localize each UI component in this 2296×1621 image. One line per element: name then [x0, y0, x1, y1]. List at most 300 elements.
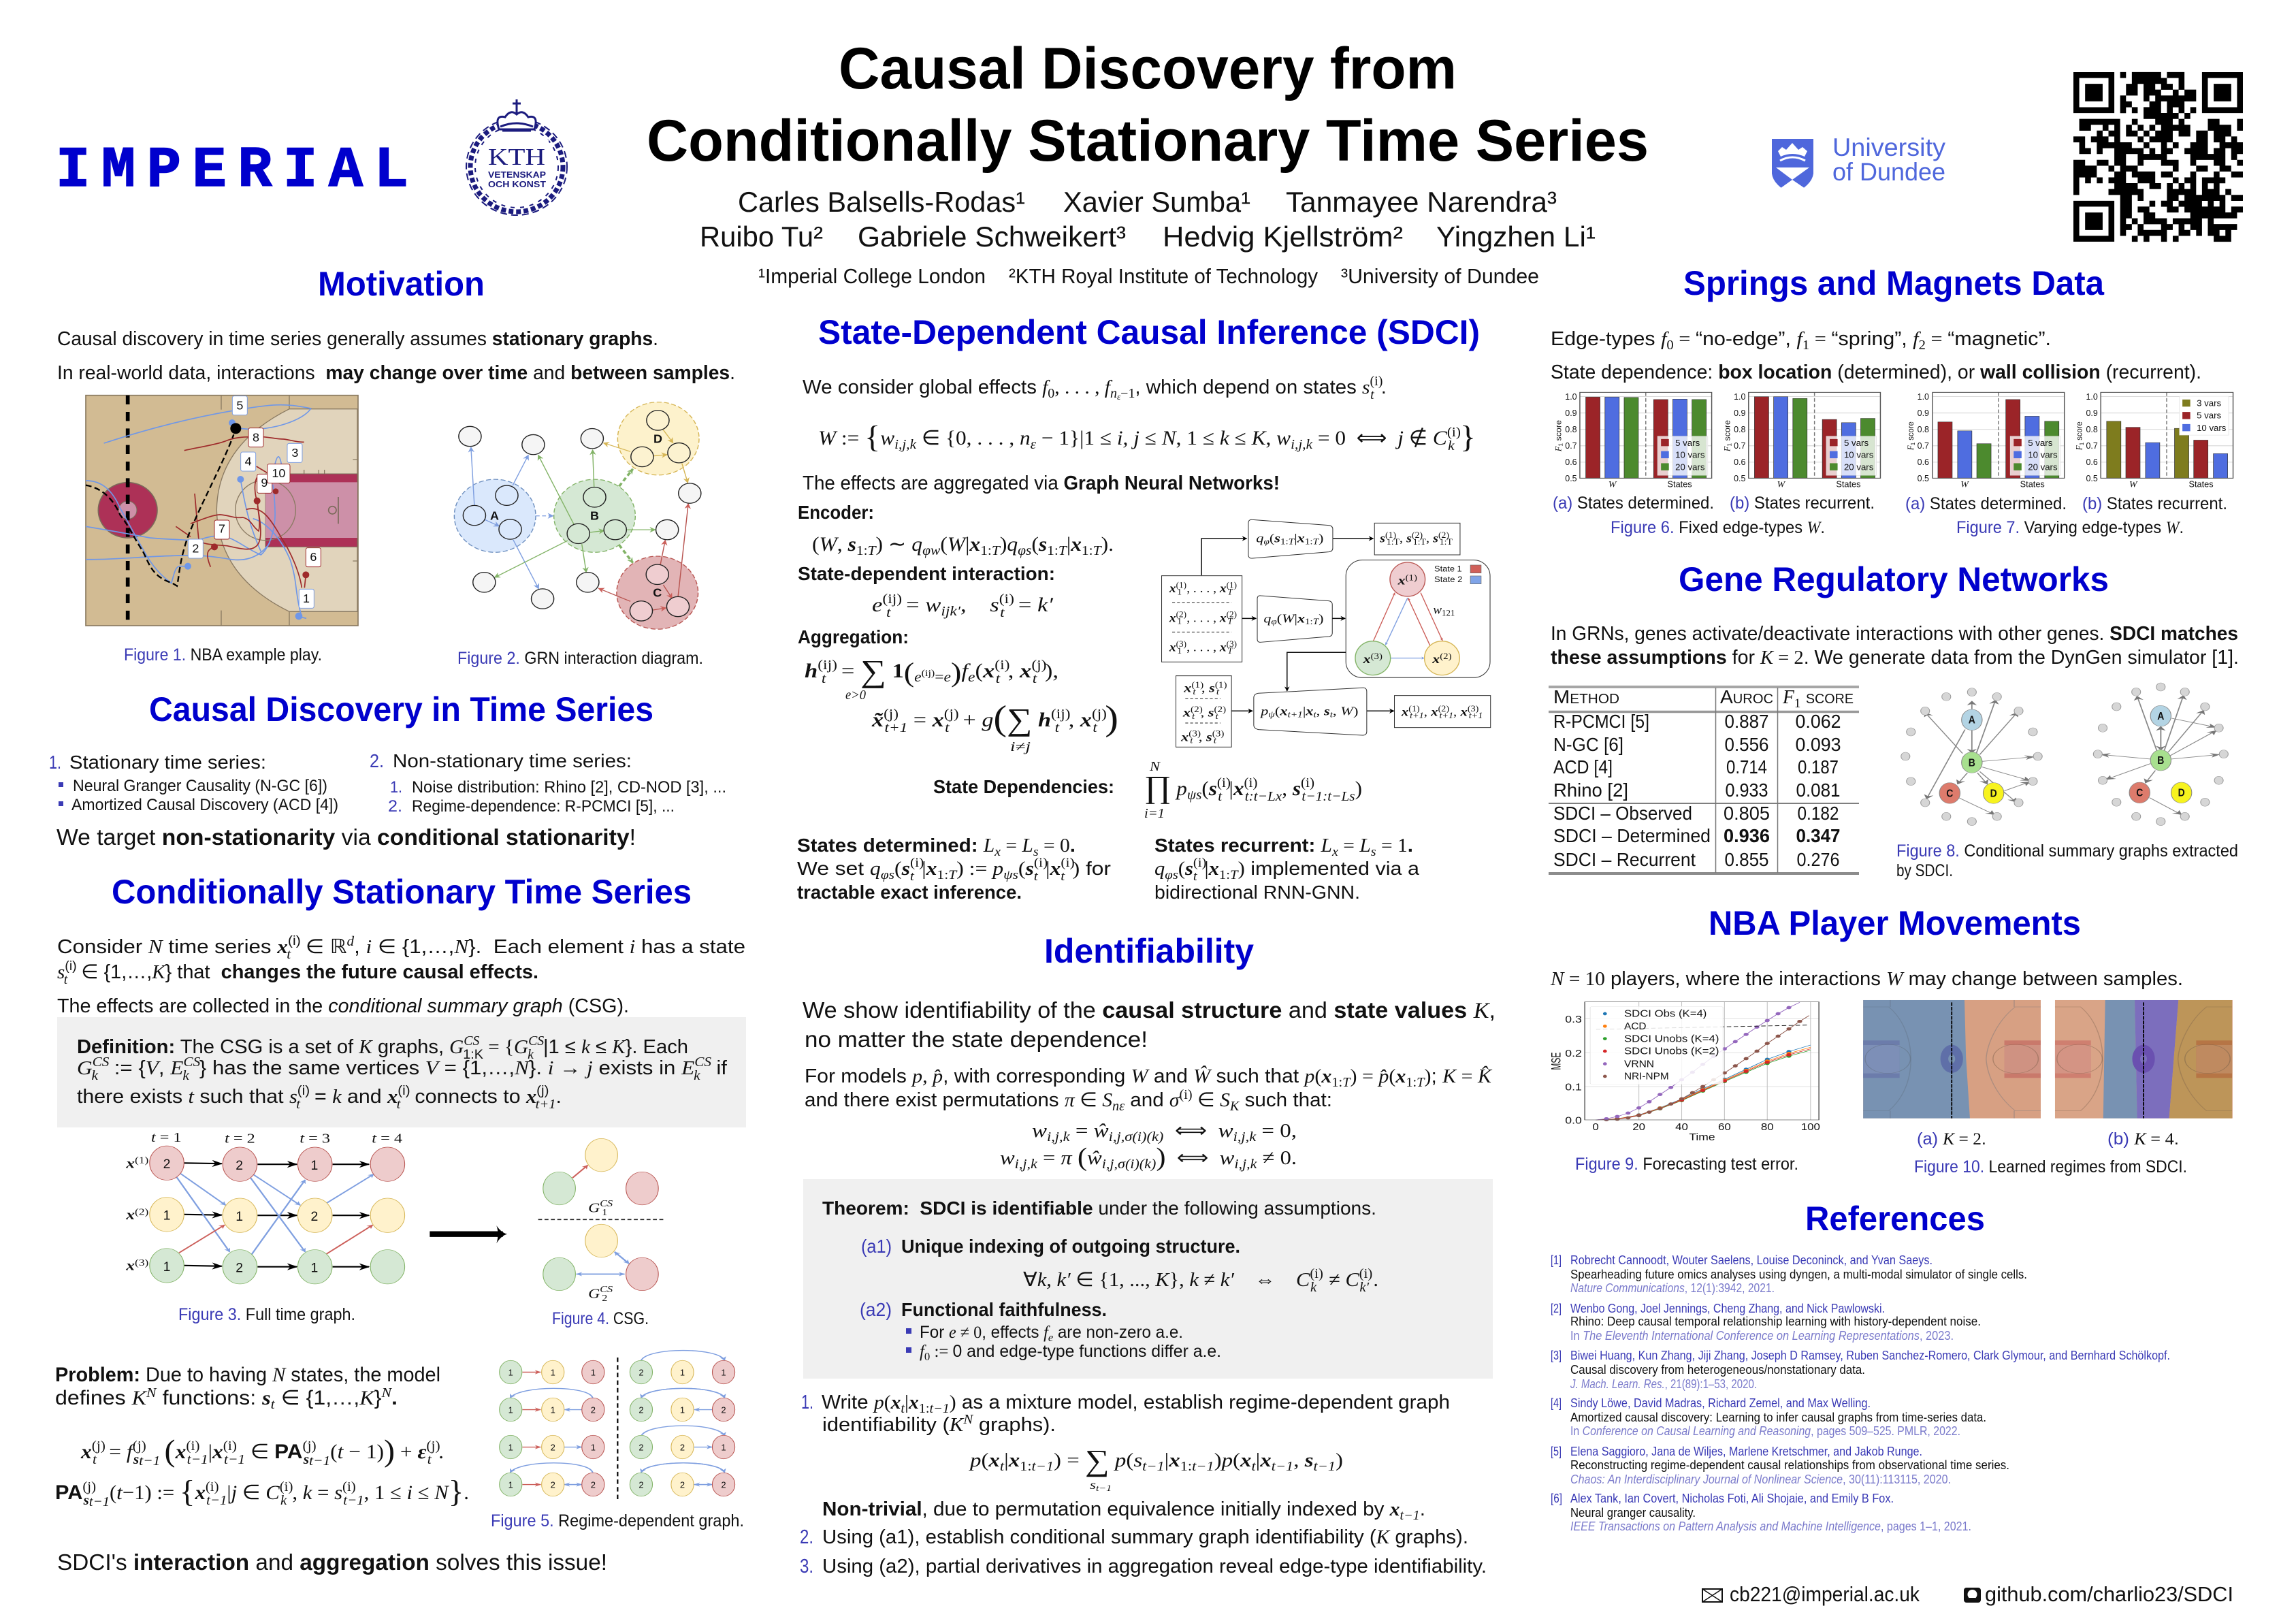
text: states recurrent: x — [1208, 858, 1219, 880]
diagram: SDCI architecture: , . . . , — [1186, 611, 1220, 624]
diagram: SDCI architecture: s — [1406, 532, 1412, 545]
figure 3: full time graph: 2 — [236, 1158, 243, 1173]
text: identifiability intro: ) — [1424, 1065, 1431, 1087]
diagram: SDCI architecture: , — [1199, 731, 1206, 743]
equation: parents: t−1 — [343, 1493, 364, 1508]
diagram: SDCI architecture: x — [1430, 705, 1438, 719]
equation: state-dependent model: = — [103, 1441, 127, 1463]
panel: definition: CS — [464, 1033, 480, 1048]
caption: figure 8: Figure 8. Conditional summary graphs extracted — [1896, 841, 2238, 861]
equation: state dependencies: ψs — [1187, 788, 1201, 803]
diagram: SDCI architecture: (2) — [1191, 705, 1203, 714]
equation: aggregation: ), — [1045, 660, 1058, 682]
diagram: SDCI architecture: x — [1169, 581, 1176, 595]
figure 8: summary graphs: B — [2157, 754, 2164, 767]
equation: state-dependent model: (i) — [223, 1439, 237, 1454]
equation: interaction: = — [900, 594, 925, 616]
equation: parents: , — [292, 1481, 303, 1504]
list: proof steps: | — [1165, 1449, 1169, 1471]
list: proof steps: x — [1008, 1449, 1020, 1471]
list: proof steps: 1: — [1020, 1459, 1032, 1474]
bar chart: fig 6a: score — [1554, 420, 1564, 443]
bar chart: fig 6a: 0.7 — [1565, 441, 1577, 451]
diagram: SDCI architecture: x — [1219, 611, 1227, 624]
text: consider: t — [287, 947, 291, 962]
diagram: SDCI architecture: ( — [1277, 612, 1282, 626]
bar chart: fig 6b: F — [1723, 446, 1732, 452]
figure 8: summary graphs: B — [1969, 756, 1975, 769]
diagram: SDCI architecture: 1 — [1177, 588, 1182, 596]
text: consider: i ∈ {1,…, N}. Each element i has a state — [366, 936, 737, 958]
bar chart: fig 7b: States — [2189, 480, 2214, 489]
figure 5: regime-dependent graph: 2 — [638, 1368, 644, 1378]
bar chart: fig 6b: 10 vars — [1844, 451, 1874, 460]
equation: permutations: = — [1070, 1120, 1094, 1142]
bar chart: fig 7b: 3 vars — [2197, 399, 2222, 408]
text: states recurrent: s — [1371, 845, 1376, 859]
text: problem — [55, 1364, 440, 1412]
equation: aggregation: (ij) — [818, 658, 837, 673]
text: identifiability intro: We show identifiability of the causal structure and state values K, — [803, 997, 1495, 1023]
diagram: SDCI architecture: (2) — [1176, 610, 1186, 620]
panel: theorem: := — [930, 1343, 953, 1361]
captions: figures 6 and 7: (b) States recurrent. — [2082, 494, 2227, 513]
table: results: 0.805 — [1724, 803, 1770, 824]
captions: figures 6 and 7: (b) States recurrent. — [1730, 494, 1875, 513]
equation: aggregation: e — [968, 670, 975, 685]
affiliations — [758, 264, 1539, 288]
text: consider: (i) — [65, 959, 77, 974]
bar chart: fig 7b: 0.5 — [2086, 474, 2098, 483]
references: Chaos: An Interdisciplinary Journal of Nonlinear Science, 30(11):113115, 2020. — [1570, 1472, 1951, 1486]
references: In The Eleventh International Conference on Learning Representations, 2023. — [1570, 1328, 1954, 1343]
equation: encoder: ) ∼ — [876, 533, 911, 556]
diagram: SDCI architecture: t — [1192, 711, 1195, 721]
panel: theorem: are non-zero a.e. — [1053, 1323, 1183, 1342]
diagram: SDCI architecture: x — [1180, 731, 1189, 743]
bar chart: fig 7b: 0.6 — [2086, 458, 2098, 467]
equation: aggregation: e) — [944, 657, 960, 688]
panel: definition: there exists t such that s — [77, 1086, 297, 1108]
captions: figures 6 and 7: Figure 7. Varying edge-types W. — [1956, 518, 2184, 537]
figure 5: regime-dependent graph: 1 — [508, 1405, 513, 1415]
references: [4] — [1551, 1396, 1562, 1410]
diagram: SDCI architecture: s — [1432, 532, 1438, 545]
equation: aggregation: ) — [1105, 699, 1118, 738]
references: Rhino: Deep causal temporal relationship learning with history-dependent noise. — [1570, 1314, 1981, 1328]
figure 3: full time graph — [125, 1129, 405, 1284]
equation: permutations: w — [1220, 1147, 1235, 1169]
line chart: forecasting test error: SDCI Unobs (K=4) — [1624, 1033, 1719, 1044]
diagram: SDCI architecture: T — [1227, 588, 1233, 596]
diagram: SDCI architecture: t — [1193, 687, 1196, 696]
text: identifiability intro: (i) — [1180, 1087, 1193, 1102]
text: global effects: f — [1105, 376, 1113, 398]
text: states recurrent: t — [1193, 869, 1197, 884]
equation: parents: j ∈ C — [231, 1481, 279, 1504]
equation: state-dependent model: | — [208, 1441, 212, 1463]
diagram: SDCI architecture: ) — [1319, 532, 1323, 546]
bar chart: fig 6b: 0.9 — [1734, 408, 1745, 418]
equation: permutations: = — [1037, 1147, 1061, 1169]
footer: github: github.com/charlio23/SDCI — [1985, 1582, 2233, 1606]
diagram: SDCI architecture: x — [1296, 532, 1305, 545]
diagram: SDCI architecture: x — [1397, 574, 1406, 587]
list: stationary and non-stationary: Noise distribution: Rhino [2], CD-NOD [3], ... — [412, 778, 726, 797]
list: proof steps: x — [908, 1392, 919, 1413]
text: states recurrent: q — [1154, 858, 1165, 880]
bar chart: fig 7b: 10 vars — [2197, 423, 2227, 433]
text: states recurrent: implemented via a — [1250, 858, 1405, 879]
equation: state-dependent model: t−1 — [309, 1454, 330, 1468]
equation: encoder: 1: — [980, 543, 992, 558]
figure 3: full time graph: (2) — [135, 1207, 149, 1217]
diagram: SDCI architecture: (1) — [1191, 680, 1203, 690]
equation: W set: W := — [818, 427, 858, 449]
equation: W set: ε — [1031, 437, 1037, 452]
equation: W set: w — [880, 427, 894, 449]
figure 1: NBA court play: 2 — [192, 541, 199, 555]
text: consider: ∈ {1,…, — [76, 961, 152, 983]
references: Robrecht Cannoodt, Wouter Saelens, Louise Deconinck, and Yvan Saeys. — [1570, 1253, 1933, 1267]
figure 3: full time graph: 1 — [163, 1259, 170, 1274]
list: stationary and non-stationary — [49, 750, 726, 816]
table: results: Rhino [2] — [1553, 780, 1628, 801]
list: proof steps: ) — [950, 1392, 956, 1413]
figure 4: CSG: CS — [600, 1284, 613, 1294]
list: proof steps — [800, 1392, 1487, 1577]
equation: state dependencies: t — [1218, 789, 1223, 804]
list: proof steps: ∑ — [1085, 1444, 1110, 1477]
bar chart: fig 6a: W — [1608, 481, 1617, 489]
references: Alex Tank, Ian Covert, Nicholas Foti, Ali Shojaie, and Emily B Fox. — [1570, 1491, 1894, 1505]
equation: parents: s — [83, 1493, 89, 1508]
equation: permutations: w — [1218, 1120, 1233, 1142]
equation: interaction: = — [1012, 594, 1037, 616]
captions: figures 6 and 7: (a) States determined. — [1905, 494, 2067, 513]
logo: KTH: VETENSKAP — [488, 170, 546, 180]
panel: definition: G — [77, 1057, 93, 1079]
table: results: 1 — [1794, 696, 1800, 711]
equation: aggregation: (j) — [1092, 707, 1107, 722]
references: Sindy Löwe, David Madras, Richard Zemel, and Max Welling. — [1570, 1396, 1871, 1410]
equation: state-dependent model: t−1 — [187, 1452, 208, 1467]
list: proof steps: ) — [1214, 1449, 1222, 1471]
equation: encoder: | — [1067, 533, 1071, 556]
text: states determined: ψs — [1003, 868, 1018, 882]
list: proof steps: graphs). — [973, 1414, 1056, 1436]
diagram: SDCI architecture: (2) — [1227, 610, 1237, 620]
captions: figure 10: (b) K = 4. — [2107, 1129, 2179, 1149]
line chart: forecasting test error: 0 — [1592, 1122, 1599, 1133]
text: problem: s — [261, 1387, 271, 1409]
panel: definition: t — [296, 1097, 301, 1112]
diagram: SDCI architecture: x — [1279, 705, 1288, 718]
references: [2] — [1551, 1301, 1562, 1315]
text: consider: The effects are collected in the conditional summary graph (CSG). — [57, 995, 629, 1017]
diagram: SDCI architecture: x — [1363, 652, 1371, 666]
figure 1: NBA court play: 6 — [310, 550, 317, 564]
panel: definition: Definition: The CSG is a set of K graphs, G — [77, 1036, 464, 1058]
logo: University of Dundee: University — [1832, 133, 1946, 161]
diagram: SDCI architecture: , . . . , — [1186, 581, 1220, 595]
text: problem: ∈ {1,…, — [275, 1387, 359, 1409]
equation: aggregation: (i) — [995, 658, 1009, 673]
list: proof steps: s — [1090, 1478, 1095, 1492]
table: results: SDCI – Determined — [1553, 825, 1711, 846]
authors: Tanmayee Narendra³ — [1286, 186, 1557, 218]
text: states determined: (i) — [1061, 856, 1075, 870]
equation: interaction: (ij) — [882, 592, 902, 607]
list: proof steps: (s — [1126, 1449, 1142, 1471]
equation: parents: PA — [55, 1481, 82, 1504]
affiliations: ³University of Dundee — [1341, 264, 1539, 288]
table: results: ACD [4] — [1553, 756, 1613, 777]
references: [3] — [1551, 1348, 1562, 1362]
list: proof steps: Using (a1), establish conditional summary graph identifiability ( K graphs). — [822, 1526, 1468, 1548]
captions: figure 10: (a) K = 2. — [1917, 1129, 1986, 1149]
panel: theorem: Unique indexing of outgoing structure. — [901, 1236, 1240, 1257]
text: states determined: s — [1024, 858, 1034, 880]
text: global effects: −1 — [1120, 386, 1135, 401]
equation: encoder: T — [1058, 543, 1068, 558]
diagram: SDCI architecture: T — [1289, 537, 1295, 546]
equation: W set: { — [864, 419, 880, 454]
list: proof steps: t — [901, 1401, 905, 1416]
list: proof steps: t−1 — [1096, 1483, 1112, 1493]
text: states determined: T — [948, 868, 958, 882]
text: states determined: p — [991, 858, 1003, 880]
text: states recurrent: = — [1338, 835, 1359, 856]
text: consider: (i) — [288, 933, 301, 948]
equation: state dependencies: i=1 — [1144, 806, 1165, 821]
diagram: SDCI architecture: t — [1215, 711, 1218, 721]
bar chart: fig 7b: 1 — [2078, 443, 2085, 445]
text: edge types: “magnetic”. — [1947, 328, 2046, 350]
equation: encoder: T — [992, 543, 1001, 558]
equation: state-dependent model: t−1 — [224, 1452, 245, 1467]
diagram: SDCI architecture: t+1 — [1288, 709, 1303, 719]
bar chart: fig 6a: 0.6 — [1565, 458, 1577, 467]
list: proof steps: Non-trivial, due to permutation equivalence initially indexed by x — [822, 1498, 1400, 1520]
figure 5: regime-dependent graph: 1 — [551, 1368, 555, 1378]
bar chart: fig 7a: 20 vars — [2028, 463, 2058, 472]
diagram: SDCI architecture: x — [1182, 706, 1191, 720]
bar chart: fig 6b — [1723, 392, 1880, 489]
equation: parents: { — [180, 1474, 195, 1509]
panel: theorem: (a2) — [860, 1299, 892, 1320]
figure 1: NBA court play: 1 — [303, 592, 310, 605]
text: global effects: ε — [1117, 391, 1121, 402]
bar chart: fig 7a: F — [1907, 445, 1915, 451]
panel: definition: k — [182, 1068, 190, 1083]
text: edge types: State dependence: box location (determined), or wall collision (recurrent). — [1551, 362, 2201, 383]
figure 3: full time graph: 2 — [236, 1261, 243, 1275]
equation: permutations: i,j,k — [1233, 1129, 1257, 1144]
panel: definition: CS — [528, 1033, 544, 1048]
diagram: SDCI architecture: x — [1401, 705, 1408, 719]
text: identifiability intro: and there exist permutations π ∈ S — [805, 1089, 1112, 1111]
panel: definition: t — [397, 1097, 401, 1112]
panel: theorem: ∀k, k′ ∈ {1, ..., K}, k ≠ k′ ⇔ C — [1023, 1269, 1309, 1291]
diagram: SDCI architecture: (3) — [1227, 639, 1237, 649]
panel: theorem: (i) — [1359, 1266, 1372, 1281]
bar chart: fig 6a: 20 vars — [1675, 463, 1705, 472]
line chart: forecasting test error: 0.2 — [1565, 1048, 1582, 1059]
equation: aggregation: t — [1093, 720, 1098, 735]
panel: definition: k ≤ K}. Each — [581, 1036, 688, 1058]
figure 1: NBA court play: 7 — [219, 521, 225, 535]
panel: definition: 1:K — [463, 1047, 483, 1062]
text: states determined: for — [1085, 858, 1107, 879]
bar chart: fig 6b: States — [1836, 480, 1861, 489]
authors: Carles Balsells-Rodas¹ — [738, 186, 1025, 218]
line chart: forecasting test error: SDCI Unobs (K=2) — [1624, 1046, 1719, 1057]
panel: definition: (j) — [536, 1083, 549, 1098]
figure 5: regime-dependent graph: 1 — [680, 1368, 685, 1378]
diagram: SDCI architecture: x — [1183, 681, 1191, 695]
figure 5: regime-dependent graph: 1 — [591, 1443, 596, 1453]
bar chart: fig 6b: W — [1777, 481, 1786, 489]
line chart: forecasting test error: 40 — [1675, 1122, 1688, 1133]
references: Elena Saggioro, Jana de Wiljes, Marlene Kretschmer, and Jakob Runge. — [1570, 1444, 1922, 1458]
logo: University of Dundee: of Dundee — [1832, 158, 1945, 186]
panel: definition: connects to — [409, 1086, 526, 1108]
equation: encoder: ( — [940, 533, 948, 556]
equation: aggregation: ( — [975, 660, 983, 682]
caption: figure 2: Figure 2. GRN interaction diagram. — [457, 649, 703, 668]
equation: encoder: W|x — [948, 533, 980, 556]
equation: aggregation: = — [907, 709, 933, 731]
figure 2: GRN interaction diagram: C — [653, 586, 662, 600]
figure 4: CSG — [538, 1138, 665, 1303]
text: states determined: ( — [894, 858, 902, 880]
bar chart: fig 7b: W — [2129, 481, 2138, 489]
text: target: We target non-stationarity via conditional stationarity! — [56, 824, 636, 850]
text: global effects: , which depend on states — [1135, 376, 1362, 398]
equation: state-dependent model: ∈ — [245, 1441, 274, 1463]
line chart: forecasting test error: MSE — [1549, 1053, 1564, 1070]
text: identifiability intro: ∈ — [1193, 1089, 1220, 1111]
references: [6] — [1551, 1491, 1562, 1505]
figure 8: summary graphs: A — [2157, 710, 2164, 722]
references — [1551, 1253, 2170, 1533]
text: states determined: ( — [1018, 858, 1026, 880]
text: states determined: | — [1046, 858, 1050, 880]
text: states recurrent: = 1 — [1376, 835, 1408, 856]
references: [1] — [1551, 1253, 1562, 1267]
equation: aggregation: = — [935, 670, 944, 685]
list: proof steps: t−1 — [1192, 1459, 1214, 1474]
equation: parents: t−1 — [89, 1494, 110, 1509]
authors: Ruibo Tu² — [700, 221, 823, 253]
text: GRNs: In GRNs, genes activate/deactivate interactions with other genes. SDCI matches — [1551, 623, 2238, 645]
list: proof steps: | — [905, 1392, 909, 1413]
line chart: forecasting test error — [1549, 1002, 1820, 1143]
diagram: SDCI architecture: T — [1227, 617, 1233, 626]
text: states determined: t — [1061, 869, 1065, 884]
figure 8: summary graphs: C — [1946, 787, 1953, 799]
figure 3: full time graph: 1 — [311, 1158, 318, 1173]
figure 3: full time graph: t = 4 — [372, 1131, 402, 1146]
diagram: SDCI architecture: 121 — [1442, 608, 1455, 617]
list: proof steps: , — [1293, 1449, 1305, 1471]
captions: figures 6 and 7: Figure 6. Fixed edge-types W. — [1611, 518, 1825, 537]
bar chart: fig 7a: 0.5 — [1918, 474, 1929, 483]
equation: aggregation: (j) — [944, 707, 959, 722]
equation: permutations: w — [1032, 1120, 1048, 1142]
equation: state dependencies: N — [1149, 759, 1161, 774]
list: proof steps: t−1 — [1032, 1459, 1054, 1474]
equation: interaction: , — [960, 594, 990, 616]
equation: aggregation: e — [914, 670, 922, 685]
equation: aggregation: (ij) — [922, 669, 935, 679]
equation: state-dependent model: x — [80, 1441, 92, 1463]
bar chart: fig 6a: 0.5 — [1565, 474, 1577, 483]
equation: state dependencies: (i) — [1217, 775, 1231, 790]
table: results: Auroc — [1720, 686, 1773, 707]
equation: parents: x — [194, 1481, 206, 1504]
equation: permutations: ⟺ — [1166, 1147, 1220, 1169]
equation: permutations: i,j,σ(i)(k) — [1102, 1157, 1156, 1172]
diagram: SDCI architecture: , . . . , — [1186, 641, 1220, 654]
bar chart: fig 7b: 0.9 — [2086, 408, 2098, 418]
list: stationary and non-stationary: Non-stationary time series: — [393, 750, 632, 771]
text: states recurrent: L — [1359, 835, 1371, 856]
bar chart: fig 7b: 0.8 — [2086, 425, 2098, 434]
equation: permutations: ŵ — [1094, 1120, 1109, 1142]
figure 1: NBA court play: 3 — [291, 446, 298, 460]
equation: state dependencies — [1144, 759, 1362, 821]
figure 5: regime-dependent graph: 2 — [638, 1443, 644, 1453]
equation: state-dependent model: x — [175, 1441, 186, 1463]
figure 8: summary graphs — [1901, 683, 2228, 826]
figure 3: full time graph: x — [125, 1156, 135, 1171]
figure 3: full time graph: (3) — [135, 1257, 149, 1268]
text: states determined: s — [1033, 845, 1039, 859]
caption: figure 4: Figure 4. CSG. — [552, 1309, 649, 1328]
figure 1: NBA court play — [86, 396, 358, 626]
text: states determined: (i) — [1034, 856, 1048, 870]
diagram: SDCI architecture: x — [1169, 611, 1176, 624]
figure 4: CSG: 1 — [602, 1208, 607, 1217]
references: Amortized causal discovery: Learning to infer causal graphs from time-series data. — [1570, 1410, 1986, 1424]
diagram: SDCI architecture: s — [1379, 532, 1385, 545]
heading: state-dependent interaction: State-dependent interaction: — [798, 563, 1055, 584]
equation: state dependencies: (i) — [1301, 775, 1314, 790]
equation: state-dependent model: (j) — [302, 1439, 317, 1454]
bar chart: fig 7b: score — [2075, 421, 2084, 443]
equation: state-dependent model: s — [303, 1452, 309, 1467]
heading: SDCI: State-Dependent Causal Inference (SDCI) — [818, 313, 1480, 351]
text: edge types — [1551, 328, 2201, 383]
figure 3: full time graph: x — [125, 1207, 135, 1222]
panel: definition: (i) — [398, 1083, 410, 1098]
diagram: SDCI architecture: (3) — [1468, 704, 1478, 713]
equation: state-dependent model: (j) — [133, 1439, 146, 1454]
list: proof steps: 2. — [800, 1526, 813, 1548]
equation: parents: (i) — [206, 1479, 219, 1494]
bar chart: fig 6b: 1.0 — [1734, 392, 1745, 402]
diagram: SDCI architecture: State 2 — [1434, 575, 1463, 584]
title: Conditionally Stationary Time Series — [647, 108, 1649, 174]
text: states recurrent: bidirectional RNN-GNN. — [1154, 882, 1360, 903]
equation: interaction: e — [872, 594, 882, 616]
list: proof steps: 1: — [919, 1401, 930, 1416]
figure 5: regime-dependent graph: 2 — [591, 1405, 596, 1415]
table: results: 0.081 — [1796, 780, 1841, 801]
text: edge types: 1 — [1802, 338, 1809, 353]
